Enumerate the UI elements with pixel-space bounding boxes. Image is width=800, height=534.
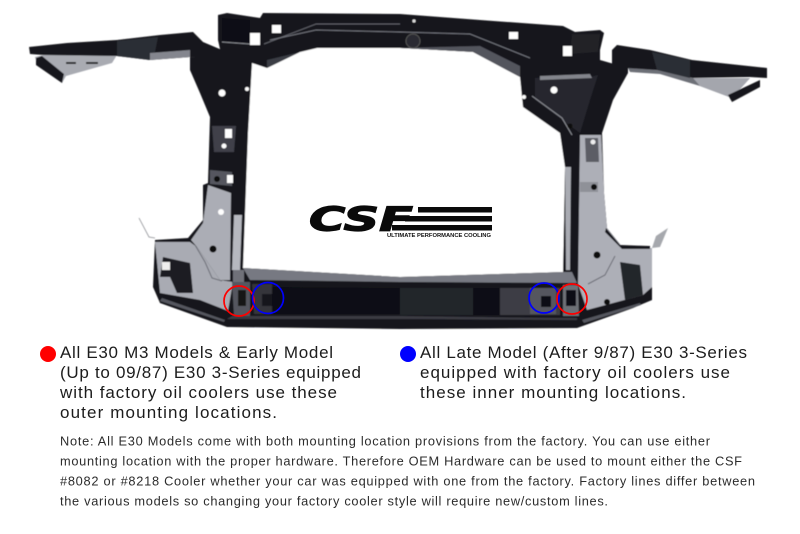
bottom beam — [160, 268, 641, 323]
red legend text: with factory oil coolers use these — [59, 383, 337, 402]
blue legend text — [420, 343, 747, 402]
left bracket tab — [139, 218, 155, 238]
logo tagline: ULTIMATE PERFORMANCE COOLING — [387, 233, 491, 239]
red legend text: outer mounting locations. — [60, 403, 277, 422]
red legend text — [59, 343, 361, 422]
blue legend text: All Late Model (After 9/87) E30 3-Series — [420, 343, 747, 362]
right wing — [612, 45, 767, 102]
red legend text: (Up to 09/87) E30 3-Series equipped — [60, 363, 361, 382]
red legend text: All E30 M3 Models & Early Model — [60, 343, 333, 362]
logo stripes — [392, 207, 492, 230]
left upright grey panels — [155, 126, 244, 311]
note text — [60, 434, 755, 508]
note text: #8082 or #8218 Cooler whether your car was equipped with one from the factory. Factory lines differ between — [60, 474, 755, 488]
right bracket tab — [652, 228, 668, 248]
blue legend text: equipped with factory oil coolers use — [420, 363, 730, 382]
left wing — [29, 32, 222, 83]
logo wordmark: CSF — [309, 200, 414, 238]
radiator support panel photo — [29, 13, 767, 329]
legend: blue inner locations — [400, 343, 747, 402]
red dot — [40, 346, 56, 362]
top bar highlights — [222, 18, 600, 77]
CSF logo — [309, 200, 492, 239]
right upright grey panels — [532, 74, 652, 310]
legend: red outer locations — [40, 343, 361, 422]
marker: inner left mounting location — [252, 282, 284, 314]
blue legend text: these inner mounting locations. — [420, 383, 686, 402]
marker: outer left mounting location — [224, 286, 254, 316]
note text: Note: All E30 Models come with both mounting location provisions from the factory. You can use either — [60, 434, 711, 448]
marker: inner right mounting location — [529, 283, 559, 313]
stamped holes — [210, 25, 610, 305]
note text: mounting location with the proper hardware. Therefore OEM Hardware can be used to mount either the CSF — [60, 454, 742, 468]
note text: the various models so changing your factory cooler style will require new/custom lines. — [60, 494, 608, 508]
blue dot — [400, 346, 416, 362]
marker: outer right mounting location — [557, 284, 587, 314]
window opening — [243, 48, 565, 277]
main frame — [153, 13, 652, 329]
